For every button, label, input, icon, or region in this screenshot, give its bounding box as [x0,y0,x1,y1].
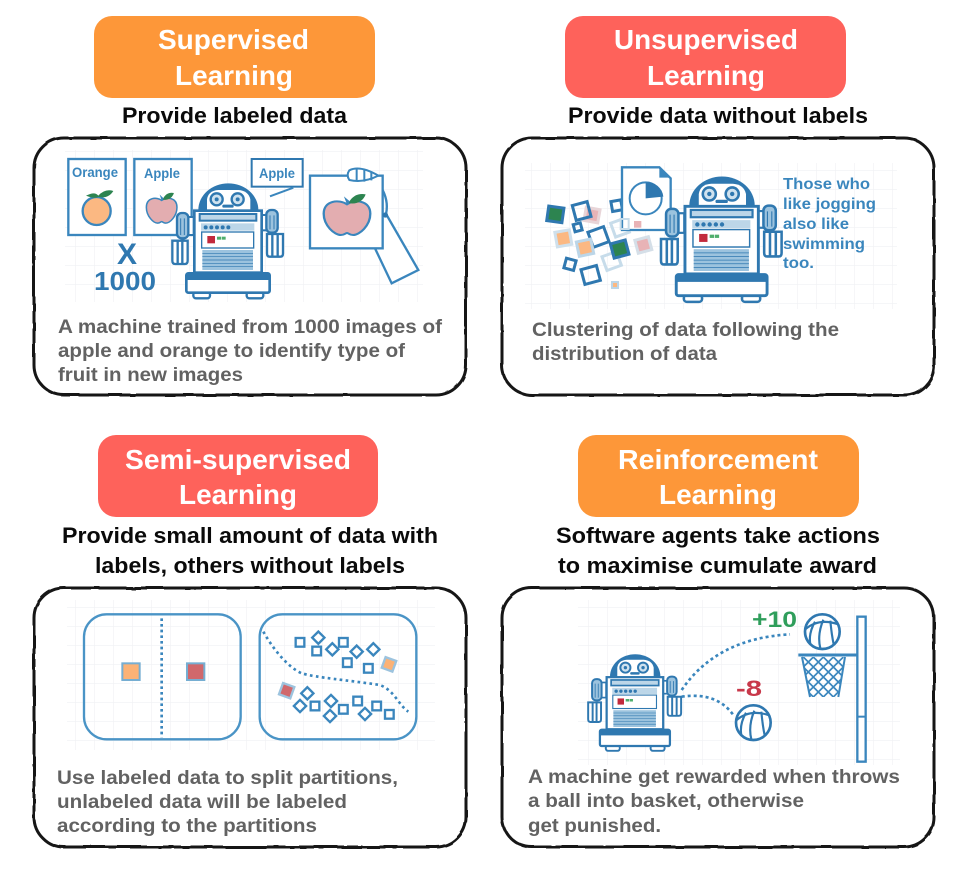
illustration: robot learning from labeled fruit cards: Orange [72,165,118,180]
heading: semi-supervised learning: Semi-supervised [125,444,351,475]
illustration: partitions with labeled and unlabeled data [67,600,435,750]
sketch frame [502,138,934,395]
description [528,766,900,837]
illustration: robot learning from labeled fruit cards: 1000 [94,266,156,296]
description: according to the partitions [57,815,317,837]
heading: supervised learning: Supervised [158,24,309,55]
description: a ball into basket, otherwise [528,790,804,812]
description [532,319,839,365]
subheading: Provide small amount of data with [62,523,438,548]
description: apple and orange to identify type of [58,340,406,362]
subheading [62,523,438,578]
illustration: robot clustering unlabeled data: too. [783,255,814,272]
panel: semi-supervised learning [34,435,466,847]
heading: semi-supervised learning: Learning [179,479,297,510]
subheading: Provide data without labels [568,103,868,128]
illustration: robot throwing ball at basket [578,600,900,765]
illustration: robot clustering unlabeled data: also like [783,216,849,233]
illustration: robot clustering unlabeled data: swimming [783,236,865,253]
description: A machine get rewarded when throws [528,766,900,788]
illustration: robot clustering unlabeled data [525,163,897,309]
sketch frame [502,588,934,847]
subheading: Software agents take actions [556,523,880,548]
heading: semi-supervised learning [98,435,378,517]
illustration: robot learning from labeled fruit cards [65,150,423,302]
description: distribution of data [532,343,717,365]
subheading: to maximise cumulate award [558,553,877,578]
panel: reinforcement learning [502,435,934,847]
illustration: robot throwing ball at basket: -8 [736,676,762,701]
heading: unsupervised learning [565,16,846,98]
illustration: robot clustering unlabeled data: like jogging [783,196,876,213]
description: Use labeled data to split partitions, [57,767,398,789]
subheading: labels, others without labels [95,553,405,578]
heading: supervised learning [94,16,375,98]
heading: reinforcement learning [578,435,859,517]
description: get punished. [528,815,661,837]
description: unlabeled data will be labeled [57,791,347,813]
heading: unsupervised learning: Unsupervised [614,24,798,55]
panel: supervised learning [34,16,466,395]
heading: supervised learning: Learning [175,60,293,91]
sketch frame [34,138,466,395]
illustration: robot learning from labeled fruit cards: X [117,238,137,271]
subheading: Provide labeled data [122,103,348,128]
heading: unsupervised learning: Learning [647,60,765,91]
illustration: robot learning from labeled fruit cards: Apple [259,166,295,181]
illustration: robot learning from labeled fruit cards: Apple [144,166,180,181]
description: A machine trained from 1000 images of [58,316,443,338]
description [58,316,443,386]
description [57,767,398,837]
heading: reinforcement learning: Reinforcement [618,444,818,475]
sketch frame [34,588,466,847]
subheading [556,523,880,578]
illustration: robot clustering unlabeled data: Those who [783,176,870,193]
panel: unsupervised learning [502,16,934,395]
description: fruit in new images [58,364,243,386]
illustration: robot throwing ball at basket: +10 [752,607,797,632]
description: Clustering of data following the [532,319,839,341]
heading: reinforcement learning: Learning [659,479,777,510]
